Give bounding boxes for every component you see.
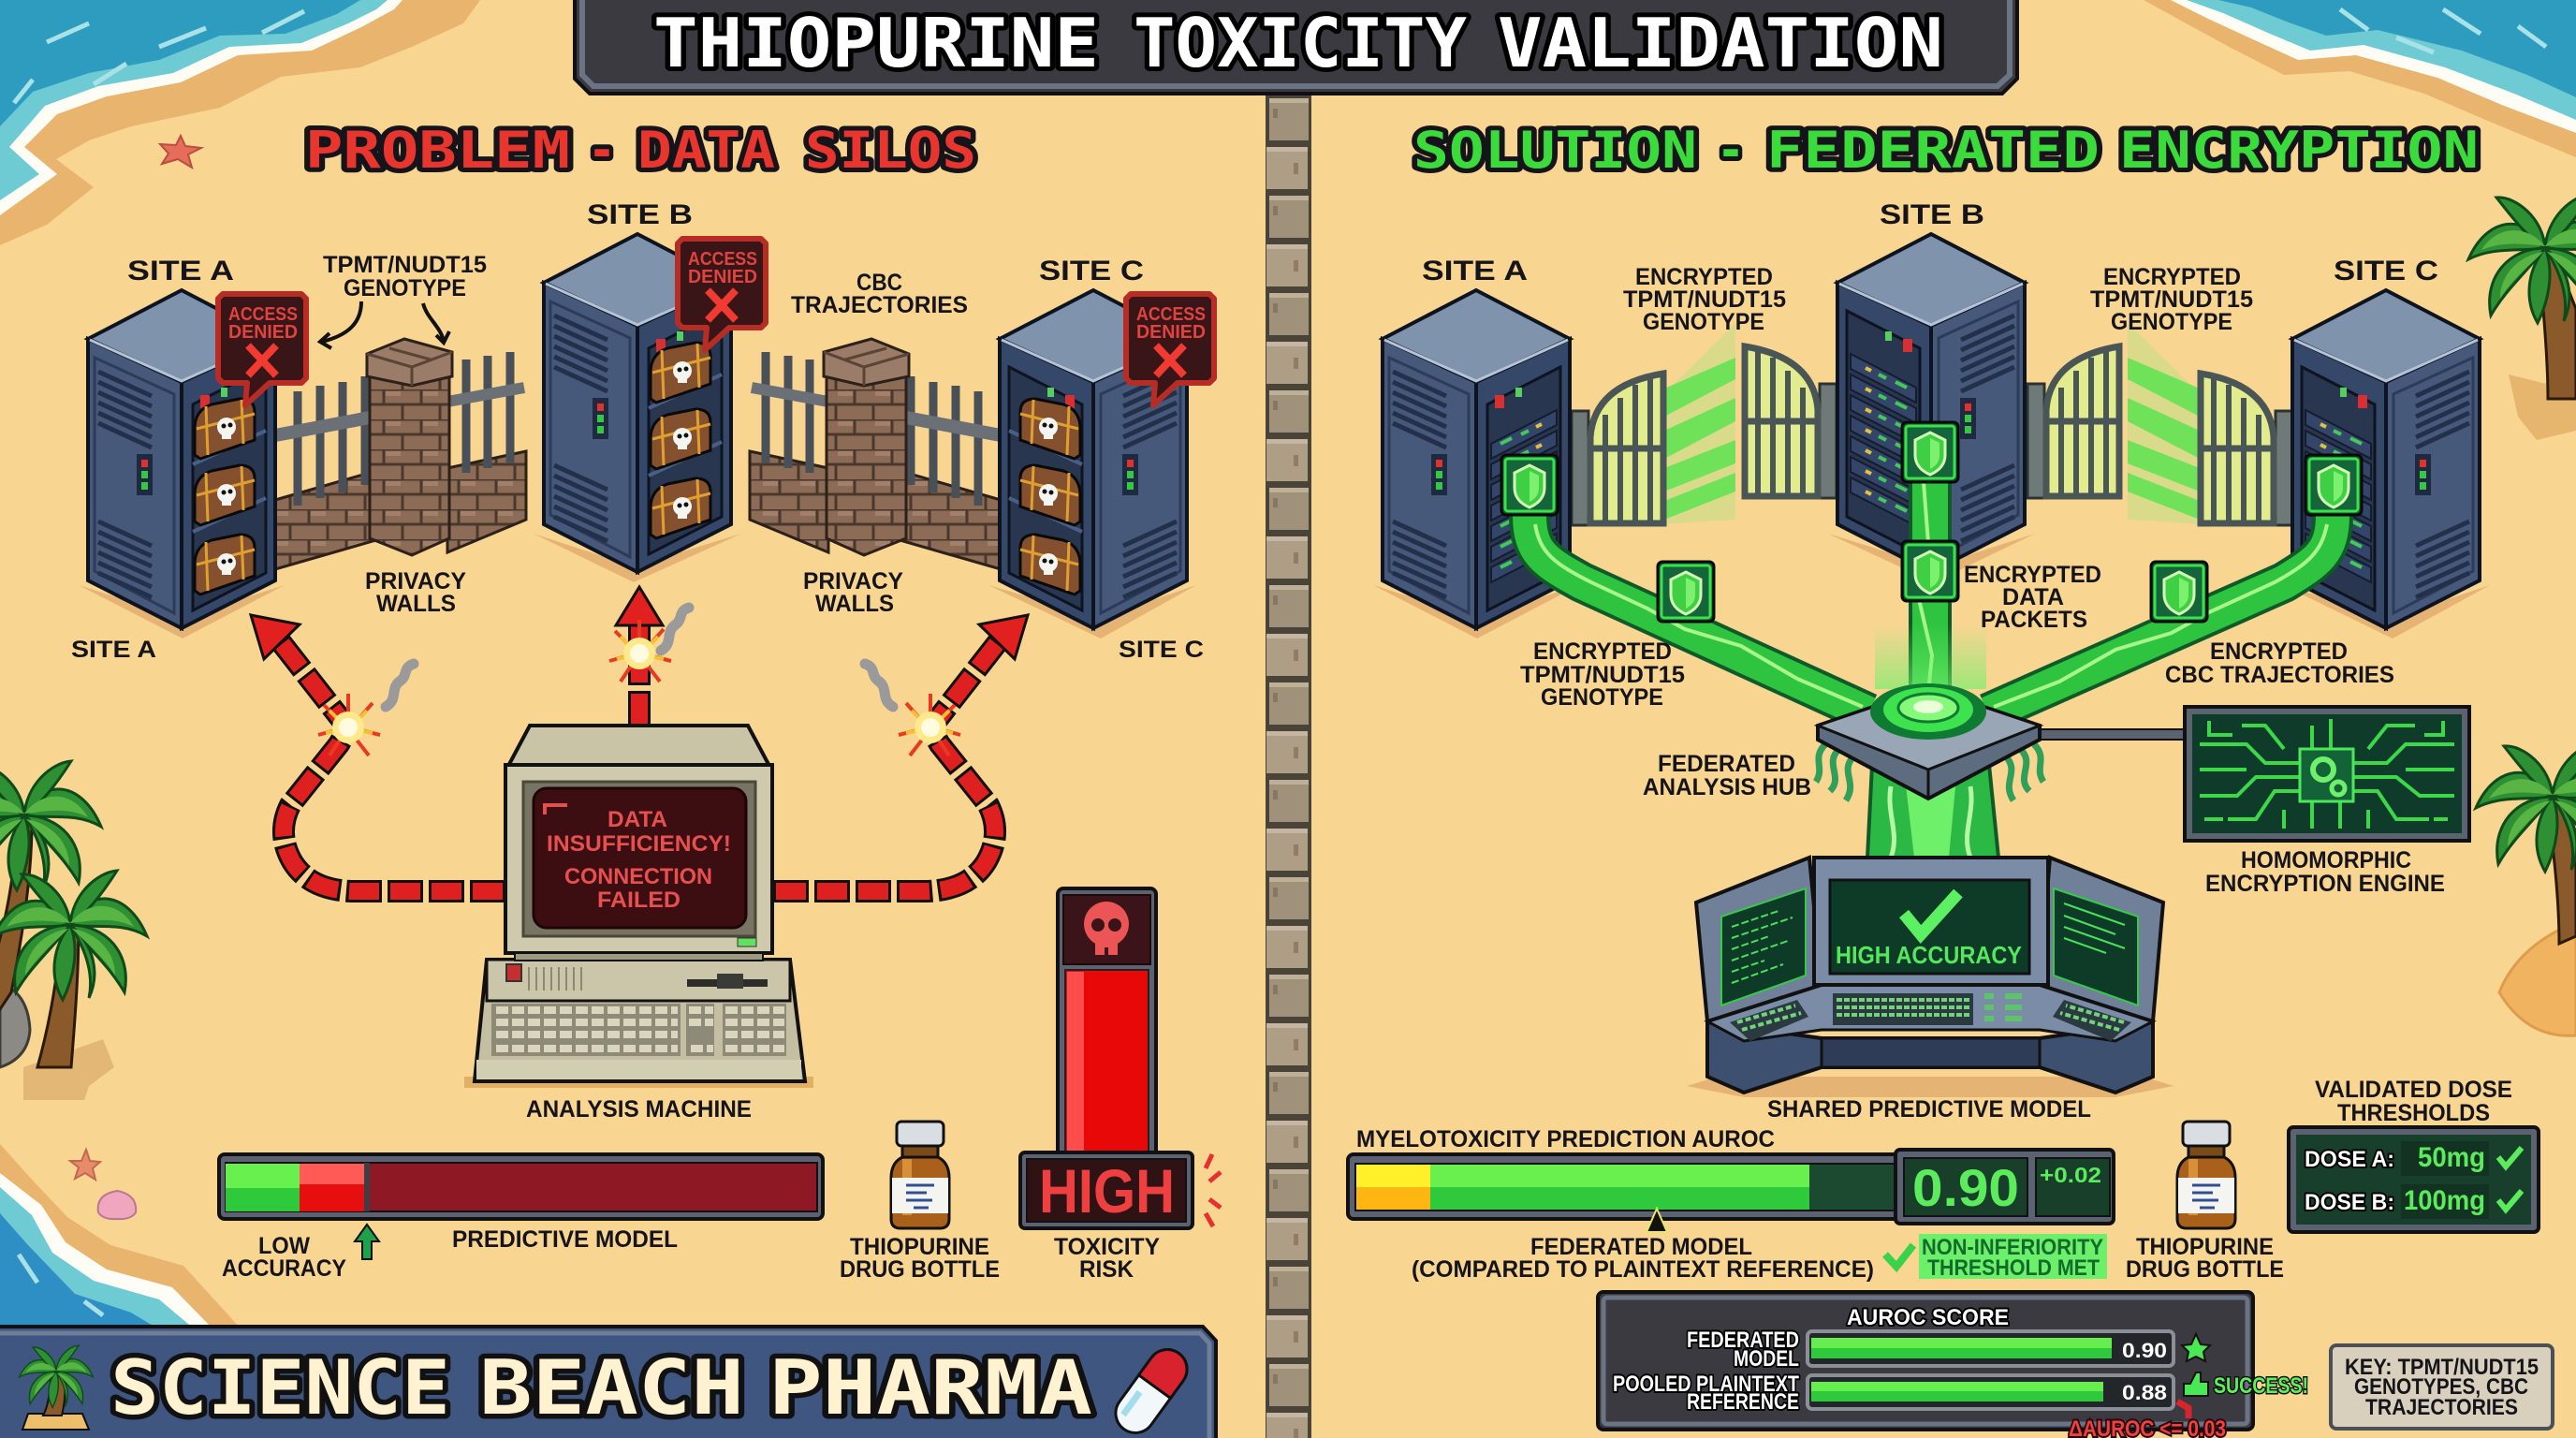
label: predictive model: PREDICTIVE MODEL	[452, 1226, 678, 1253]
row label: federated: FEDERATED	[1687, 1328, 1799, 1353]
label: low accuracy: LOW	[258, 1233, 310, 1259]
hub glow column	[1875, 624, 1986, 689]
heading: AUROC SCORE	[1847, 1305, 2009, 1330]
screen text: DATA	[607, 807, 667, 832]
label: encrypted genotype left	[1623, 264, 1786, 335]
label: toxicity risk: TOXICITY	[1054, 1234, 1160, 1260]
label: validated dose thresholds	[2315, 1077, 2512, 1126]
icon: skull	[1084, 902, 1129, 955]
analysis machine computer	[464, 726, 813, 1088]
data beams: gates one	[1664, 323, 1735, 524]
value readout: 0.90	[1912, 1158, 2019, 1217]
heading: problem: SILOS	[805, 121, 976, 180]
screen text: INSUFFICIENCY!	[547, 831, 731, 857]
screen text	[547, 807, 731, 913]
label: privacy walls left: PRIVACY	[365, 568, 466, 594]
label: hub	[1643, 751, 1811, 800]
ocean: top left	[0, 0, 480, 245]
link: hub to engine	[2036, 729, 2188, 740]
keyboard	[491, 1004, 786, 1056]
icon: pill	[1108, 1342, 1194, 1438]
label: encrypted data packets: ENCRYPTED	[1964, 562, 2101, 588]
title text: VALIDATION	[1498, 4, 1943, 82]
privacy wall B-C	[750, 339, 1001, 569]
federated analysis hub	[1816, 683, 2043, 800]
icon: sand mound right	[2499, 922, 2576, 1035]
ocean: top right	[2144, 0, 2576, 157]
shared predictive model console: HIGH ACCURACY	[1836, 941, 2022, 969]
row bar: pooled: 0.88	[2122, 1381, 2167, 1404]
value readout	[1895, 1150, 2114, 1224]
label: hub: ANALYSIS HUB	[1643, 774, 1811, 800]
icon: starfish bottom left	[70, 1150, 100, 1180]
label: privacy walls left: WALLS	[376, 591, 456, 617]
label: CBC trajectories: TRAJECTORIES	[791, 292, 968, 318]
badge: non-inferiority	[1919, 1234, 2107, 1281]
label: thiopurine drug bottle: THIOPURINE	[850, 1234, 989, 1260]
label: site C: SITE C	[2334, 256, 2438, 286]
label: engine	[2205, 847, 2445, 897]
left monitor	[1696, 858, 1822, 1021]
heading: solution: -	[1717, 121, 1745, 180]
label: genotype: TPMT/NUDT15	[323, 252, 487, 278]
badge: non-inferiority: NON-INFERIORITY	[1922, 1235, 2103, 1260]
server: site C	[1000, 290, 1187, 628]
label: encrypted genotype lower: ENCRYPTED	[1533, 638, 1672, 665]
value readout: +0.02	[2040, 1163, 2101, 1187]
row label: pooled: POOLED PLAINTEXT	[1613, 1372, 1799, 1397]
label: genotype	[323, 252, 487, 301]
label: encrypted genotype right	[2090, 264, 2253, 335]
arrow: genotype pointers	[320, 301, 449, 348]
desk	[1707, 985, 2153, 1041]
encrypted packet: site C	[2305, 455, 2362, 515]
panel: key: TRAJECTORIES	[2365, 1395, 2518, 1420]
label: encrypted CBC: ENCRYPTED	[2210, 638, 2348, 665]
icon: thiopurine bottle	[891, 1122, 949, 1228]
AUROC progress bar	[1348, 1150, 2114, 1224]
label: encrypted data packets: PACKETS	[1981, 607, 2087, 633]
icon: right palm shadow	[2509, 374, 2576, 440]
row label: federated: MODEL	[1734, 1346, 1799, 1372]
label: encrypted genotype lower: TPMT/NUDT15	[1520, 662, 1685, 688]
panel: dose thresholds	[2289, 1127, 2539, 1232]
title text: THIOPURINE	[653, 4, 1099, 82]
panel: dose thresholds: DOSE B:	[2305, 1190, 2394, 1215]
footer text: SCIENCE	[110, 1344, 450, 1431]
icon: thumbs up	[2184, 1372, 2208, 1396]
label: low accuracy	[222, 1233, 346, 1282]
icon: palm tree right bottom	[2476, 742, 2576, 944]
marker: federated model	[1647, 1209, 1667, 1232]
arrow: failed connection to site B	[609, 587, 689, 726]
label: thiopurine drug bottle	[840, 1234, 1000, 1283]
heading: problem: PROBLEM	[305, 121, 570, 180]
label: encrypted genotype right: ENCRYPTED	[2103, 264, 2241, 290]
label: thiopurine bottle right	[2126, 1234, 2284, 1283]
label: CBC trajectories: CBC	[856, 270, 902, 296]
label: encrypted genotype lower	[1520, 638, 1685, 711]
arrow: failed connection to site C	[773, 615, 1028, 891]
open gates: B to C	[2027, 346, 2292, 525]
data beams: gates two	[2128, 323, 2200, 524]
label: encrypted genotype left: TPMT/NUDT15	[1623, 286, 1786, 313]
label: myelotoxicity AUROC: MYELOTOXICITY PREDICTION AUROC	[1356, 1126, 1775, 1152]
heading: problem: DATA	[637, 121, 775, 180]
circuit traces	[2200, 719, 2454, 829]
panel: key	[2331, 1345, 2553, 1429]
encrypted packet: site A	[1501, 455, 1558, 515]
label: privacy walls left	[365, 568, 466, 617]
row bar: federated	[1808, 1331, 2174, 1366]
shared predictive model console	[1687, 858, 2174, 1097]
label: toxicity risk: RISK	[1079, 1256, 1134, 1283]
label: analysis machine: ANALYSIS MACHINE	[526, 1096, 752, 1123]
icon: beach rock	[0, 983, 30, 1067]
icon: palm tree right top	[2468, 194, 2576, 399]
toxicity risk gauge: HIGH	[1039, 1156, 1175, 1225]
label: engine: ENCRYPTION ENGINE	[2205, 871, 2445, 897]
icon: starfish top left	[160, 136, 201, 168]
panel: dose thresholds: 50mg	[2418, 1142, 2485, 1173]
ocean: bottom left	[0, 1144, 242, 1329]
row label: federated	[1687, 1328, 1799, 1372]
footer text: BEACH	[479, 1344, 744, 1431]
row bar: federated: 0.90	[2122, 1339, 2167, 1362]
label: privacy walls right: WALLS	[815, 591, 894, 617]
label: encrypted CBC	[2165, 638, 2394, 688]
label: encrypted genotype left: ENCRYPTED	[1635, 264, 1773, 290]
arrow: failed connection to site A	[251, 615, 505, 891]
icon: palm tree one	[0, 761, 101, 1020]
panel: problem	[71, 199, 1221, 1283]
heading: solution	[1413, 121, 2479, 180]
panel: key: GENOTYPES, CBC	[2354, 1374, 2528, 1400]
label: federated model	[1412, 1234, 1874, 1283]
icon: star	[2182, 1334, 2210, 1361]
data pipes	[1530, 482, 2333, 713]
encrypted packet: site B top	[1902, 422, 1958, 482]
label: encrypted genotype lower: GENOTYPE	[1541, 684, 1663, 711]
label: site A top: SITE A	[127, 256, 234, 286]
icon: palm shadow	[23, 1039, 114, 1100]
footer text: PHARMA	[768, 1344, 1092, 1431]
privacy wall A-B	[275, 339, 526, 569]
panel: dose thresholds: 100mg	[2404, 1185, 2485, 1216]
label: validated dose thresholds: VALIDATED DOSE	[2315, 1077, 2512, 1103]
callout: access denied site C	[1126, 294, 1214, 405]
label: genotype: GENOTYPE	[344, 275, 466, 301]
arrow: accuracy marker	[355, 1225, 379, 1259]
arrow: delta pointer	[2177, 1401, 2188, 1418]
icon: alarm sparks	[1206, 1154, 1221, 1226]
server: site C encrypted	[2292, 290, 2480, 628]
heading: solution: SOLUTION	[1413, 121, 1697, 180]
title text	[653, 4, 1943, 82]
server: site B	[544, 234, 731, 572]
label: site A lower: SITE A	[71, 637, 156, 663]
row label: pooled	[1613, 1372, 1799, 1415]
heading: solution: FEDERATED	[1766, 121, 2100, 180]
label: encrypted data packets: DATA	[2002, 584, 2064, 610]
label: thiopurine drug bottle: DRUG BOTTLE	[840, 1256, 1000, 1283]
label: privacy walls right	[803, 568, 903, 617]
predictive model bar	[219, 1154, 823, 1219]
label: toxicity risk	[1054, 1234, 1160, 1283]
label: low accuracy: ACCURACY	[222, 1255, 346, 1282]
heading: problem: -	[588, 121, 616, 180]
screen text: CONNECTION	[564, 864, 712, 889]
label: encrypted genotype right: TPMT/NUDT15	[2090, 286, 2253, 313]
label: site C top: SITE C	[1039, 256, 1144, 286]
label: federated model: (COMPARED TO PLAINTEXT REFERENCE)	[1412, 1256, 1874, 1283]
server shadows	[1373, 534, 2490, 638]
server: site A encrypted	[1383, 290, 1570, 628]
heading: solution: ENCRYPTION	[2119, 121, 2479, 180]
panel: dose thresholds: DOSE A:	[2305, 1147, 2394, 1172]
server: site A	[88, 290, 275, 628]
label: engine: HOMOMORPHIC	[2241, 847, 2411, 873]
title text: TOXICITY	[1134, 4, 1468, 82]
label: encrypted genotype left: GENOTYPE	[1643, 309, 1764, 335]
label: thiopurine bottle right: DRUG BOTTLE	[2126, 1256, 2284, 1283]
heading: problem	[305, 121, 976, 180]
row label: pooled: REFERENCE	[1687, 1389, 1799, 1415]
label: privacy walls right: PRIVACY	[803, 568, 903, 594]
panel: solution	[1348, 199, 2553, 1438]
label: encrypted genotype right: GENOTYPE	[2111, 309, 2232, 335]
label: success: SUCCESS!	[2214, 1373, 2308, 1399]
open gates: A to B	[1572, 346, 1837, 525]
label: validated dose thresholds: THRESHOLDS	[2337, 1100, 2490, 1126]
icon: palm tree two	[0, 871, 147, 1067]
flow: hub to console	[1867, 765, 1998, 858]
label: site A: SITE A	[1422, 256, 1528, 286]
icon: footer palm	[20, 1345, 93, 1430]
screen text: FAILED	[597, 888, 681, 913]
callout: access denied site A	[218, 294, 306, 405]
icon: check	[1885, 1245, 1913, 1267]
encrypted packet: right mid	[2151, 562, 2207, 622]
label: CBC trajectories	[791, 270, 968, 318]
label: hub: FEDERATED	[1658, 751, 1795, 777]
label: shared predictive model: SHARED PREDICTIVE MODEL	[1767, 1096, 2091, 1123]
row bar: pooled	[1808, 1375, 2174, 1409]
label: federated model: FEDERATED MODEL	[1530, 1234, 1752, 1260]
label: thiopurine bottle right: THIOPURINE	[2136, 1234, 2274, 1260]
encrypted packet: left mid	[1658, 562, 1714, 622]
label: encrypted data packets	[1964, 562, 2101, 633]
server shadows	[79, 534, 1196, 638]
label: site B: SITE B	[587, 199, 693, 230]
toxicity risk gauge	[1020, 888, 1193, 1228]
badge: non-inferiority: THRESHOLD MET	[1927, 1255, 2100, 1281]
console base	[1707, 1022, 2153, 1093]
encrypted packet: site B lower	[1902, 541, 1958, 601]
icon: thiopurine bottle right	[2177, 1122, 2235, 1228]
server: site B encrypted	[1837, 234, 2025, 572]
title plate	[575, 0, 2017, 94]
panel: AUROC score	[1598, 1292, 2253, 1430]
center stone divider wall	[1266, 95, 1311, 1438]
label: encrypted CBC: CBC TRAJECTORIES	[2165, 662, 2394, 688]
label: site C lower: SITE C	[1119, 637, 1204, 663]
homomorphic encryption engine	[2185, 707, 2469, 841]
center monitor	[1814, 858, 2048, 985]
label: site B: SITE B	[1880, 199, 1984, 230]
icon: seashell	[98, 1191, 136, 1219]
callout: access denied site B	[678, 239, 766, 350]
panel: key: KEY: TPMT/NUDT15	[2345, 1355, 2539, 1380]
footer banner	[0, 1327, 1216, 1438]
footer text	[110, 1344, 1092, 1431]
right monitor	[2040, 858, 2163, 1021]
